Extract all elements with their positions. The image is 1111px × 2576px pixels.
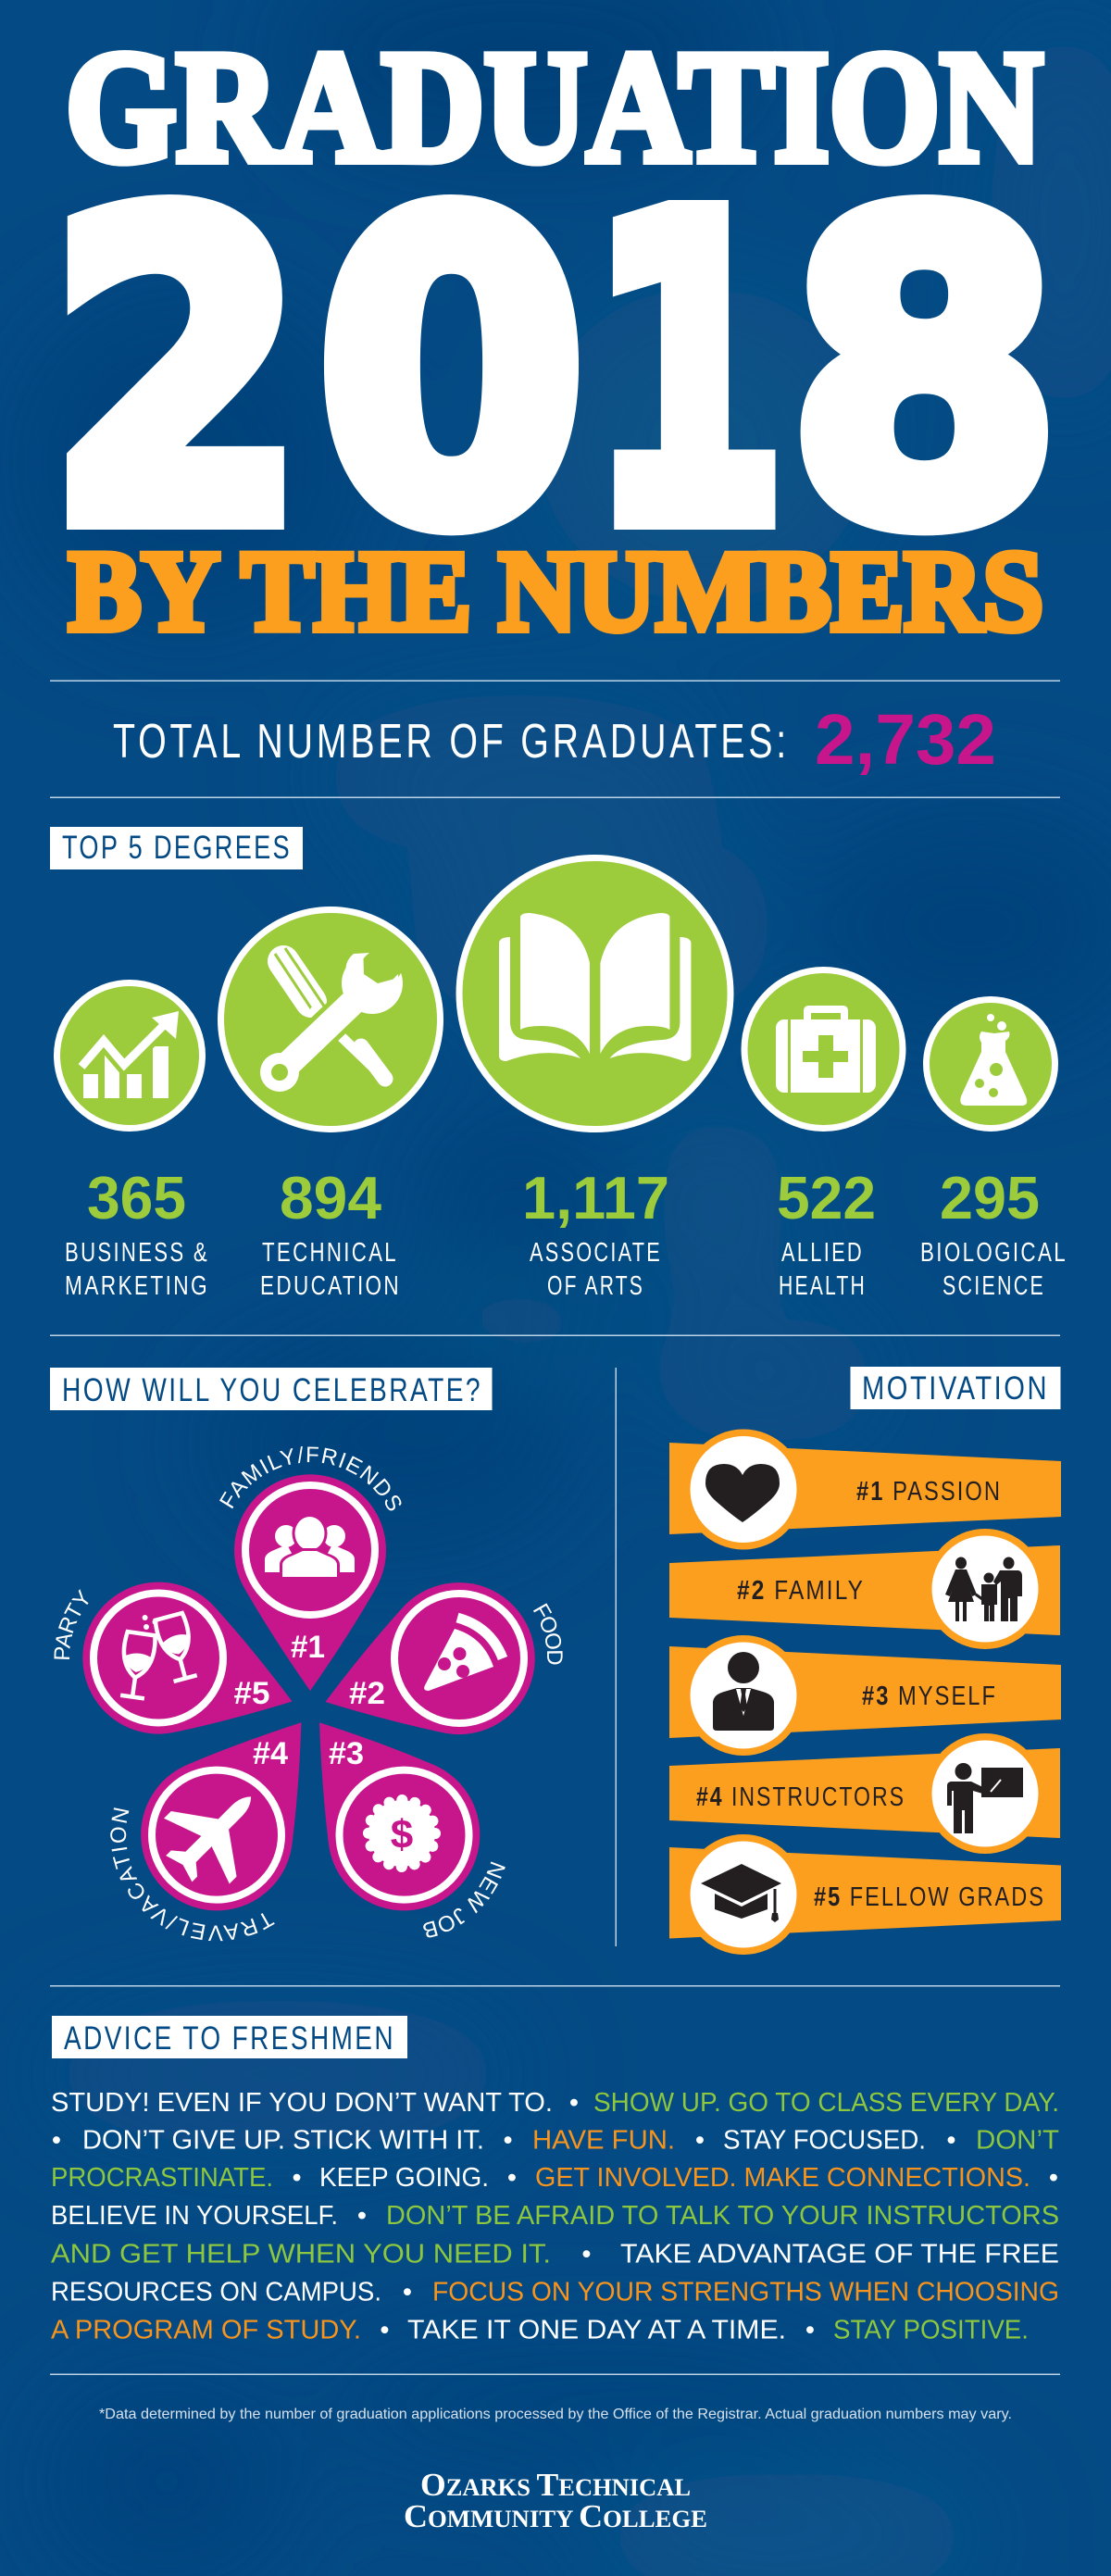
title: 2018: 0	[318, 131, 585, 616]
pin: family and friends	[234, 1474, 386, 1691]
text block: advice	[51, 2088, 1059, 2345]
text block: advice: GET INVOLVED. MAKE CONNECTIONS.	[535, 2163, 1030, 2193]
heading: advice to freshmen: ADVICE TO FRESHMEN	[64, 2020, 395, 2057]
icon: wrench and screwdriver	[220, 909, 441, 1130]
text block: advice: TAKE IT ONE DAY AT A TIME.	[407, 2316, 786, 2345]
panel: motivation ribbons	[669, 1430, 1061, 1955]
text block: advice: DON’T GIVE UP. STICK WITH IT.	[82, 2126, 484, 2156]
pin: food: #2	[349, 1676, 385, 1711]
title: 2018: 1	[590, 131, 786, 616]
text block: advice: •	[695, 2126, 705, 2156]
ribbon: myself: #3 MYSELF	[862, 1682, 997, 1711]
stat: business and marketing: MARKETING	[65, 1271, 209, 1301]
text block: advice: A PROGRAM OF STUDY.	[51, 2316, 361, 2345]
pin: new job: $	[391, 1812, 413, 1857]
stat: biological science: SCIENCE	[942, 1271, 1045, 1301]
text block: advice: •	[380, 2316, 390, 2345]
total number of graduates: TOTAL NUMBER OF GRADUATES:	[113, 715, 790, 769]
text block: advice: DON’T	[976, 2126, 1059, 2156]
text block: advice: STAY POSITIVE.	[833, 2316, 1029, 2345]
curved labels: FOOD	[533, 1603, 563, 1665]
text block: advice: FOCUS ON YOUR STRENGTHS WHEN CHOOSING	[432, 2277, 1059, 2307]
pin: travel and vacation: #4	[253, 1736, 288, 1771]
stat: business and marketing: BUSINESS &	[65, 1238, 209, 1268]
stat: biological science: BIOLOGICAL	[920, 1238, 1067, 1268]
ribbon: fellow grads: #5 FELLOW GRADS	[814, 1882, 1045, 1912]
panel: top 5 degrees	[57, 857, 1067, 1301]
icon: business chart	[57, 983, 202, 1128]
text block: advice: DON’T BE AFRAID TO TALK TO YOUR INSTRUCTORS	[386, 2201, 1059, 2231]
panel: celebrate pins	[54, 1446, 563, 1941]
text block: advice: •	[1049, 2163, 1058, 2193]
curved labels: TRAVEL/VACATION	[110, 1807, 275, 1941]
pin: family and friends: #1	[291, 1630, 325, 1665]
heading: motivation: MOTIVATION	[862, 1370, 1049, 1407]
stat: biological science: 295	[940, 1164, 1040, 1232]
total number of graduates	[113, 700, 996, 780]
heading: top 5 degrees: TOP 5 DEGREES	[62, 830, 292, 866]
text block: advice: HAVE FUN.	[532, 2126, 675, 2156]
ribbon: instructors: #4 INSTRUCTORS	[696, 1782, 905, 1812]
text block: advice: RESOURCES ON CAMPUS.	[51, 2277, 381, 2307]
ribbon: passion	[669, 1430, 1061, 1550]
title: 2018: 8	[789, 131, 1060, 616]
total number of graduates: 2,732	[815, 700, 996, 780]
heading: how will you celebrate: HOW WILL YOU CELEBRATE?	[62, 1372, 482, 1408]
pin: party: #5	[233, 1676, 270, 1711]
ribbon: myself	[669, 1635, 1061, 1756]
text block: advice: •	[507, 2163, 517, 2193]
stat: allied health: ALLIED	[781, 1238, 864, 1268]
text block: advice: •	[403, 2277, 412, 2307]
stat: biological science	[920, 1164, 1067, 1301]
text block: advice: TAKE ADVANTAGE OF THE FREE	[620, 2239, 1059, 2269]
text block: advice: SHOW UP. GO TO CLASS EVERY DAY.	[593, 2088, 1059, 2118]
text block: advice: •	[581, 2239, 592, 2269]
stat: associate of arts: ASSOCIATE	[530, 1238, 662, 1268]
text block: advice: •	[504, 2126, 513, 2156]
stat: technical education: EDUCATION	[260, 1271, 401, 1301]
stat: technical education: TECHNICAL	[262, 1238, 398, 1268]
stat: allied health: HEALTH	[779, 1271, 867, 1301]
logo: Ozarks Technical Community College: COMMUNITY COLLEGE	[404, 2498, 707, 2534]
heading: top 5 degrees	[50, 827, 303, 869]
stat: associate of arts: 1,117	[522, 1164, 669, 1232]
stat: technical education: 894	[280, 1164, 381, 1232]
stat: associate of arts	[522, 1164, 669, 1301]
title: 2018: 2	[49, 131, 305, 616]
icon: flask	[926, 1000, 1055, 1128]
stat: allied health: 522	[777, 1164, 876, 1232]
icon: open book	[459, 857, 730, 1130]
ribbon: family: #2 FAMILY	[737, 1576, 865, 1606]
text block: advice: STAY FOCUSED.	[723, 2126, 926, 2156]
logo: Ozarks Technical Community College	[404, 2467, 707, 2534]
title: BY THE NUMBERS: BY THE NUMBERS	[69, 528, 1043, 655]
text block: advice: BELIEVE IN YOURSELF.	[51, 2201, 338, 2231]
stat: allied health	[777, 1164, 876, 1301]
text block: advice: •	[293, 2163, 302, 2193]
text block: advice: •	[946, 2126, 956, 2156]
text block: advice: AND GET HELP WHEN YOU NEED IT.	[51, 2239, 551, 2269]
pin: new job: #3	[329, 1736, 364, 1771]
curved labels: NEW JOB	[423, 1861, 506, 1937]
stat: associate of arts: OF ARTS	[547, 1271, 644, 1301]
curved labels	[54, 1446, 563, 1941]
text block: advice: •	[805, 2316, 815, 2345]
text block: advice: •	[52, 2126, 61, 2156]
text block: advice: •	[357, 2201, 367, 2231]
ribbon: fellow grads	[669, 1834, 1061, 1955]
pin: travel and vacation	[110, 1677, 362, 1941]
text block: advice: STUDY! EVEN IF YOU DON’T WANT TO.	[51, 2088, 553, 2118]
pin: new job	[259, 1677, 510, 1941]
stat: business and marketing	[65, 1164, 209, 1301]
pin: food	[302, 1563, 555, 1774]
text block: advice: KEEP GOING.	[319, 2163, 489, 2193]
ribbon: instructors	[669, 1733, 1060, 1854]
text block: advice: PROCRASTINATE.	[51, 2163, 273, 2193]
text block: advice: •	[569, 2088, 579, 2118]
stat: business and marketing: 365	[87, 1164, 186, 1232]
pin: party	[63, 1562, 316, 1773]
curved labels: PARTY	[54, 1589, 89, 1659]
ribbon: family	[669, 1529, 1060, 1649]
icon: first aid kit	[744, 970, 903, 1128]
curved labels: FAMILY/FRIENDS	[219, 1446, 402, 1511]
ribbon: passion: #1 PASSION	[856, 1477, 1002, 1507]
stat: technical education	[260, 1164, 401, 1301]
footnote: *Data determined by the number of graduation applications processed by the Office of the Registrar. Actual graduation numbers may vary.	[99, 2407, 1012, 2422]
logo: Ozarks Technical Community College: OZARKS TECHNICAL	[420, 2467, 691, 2503]
